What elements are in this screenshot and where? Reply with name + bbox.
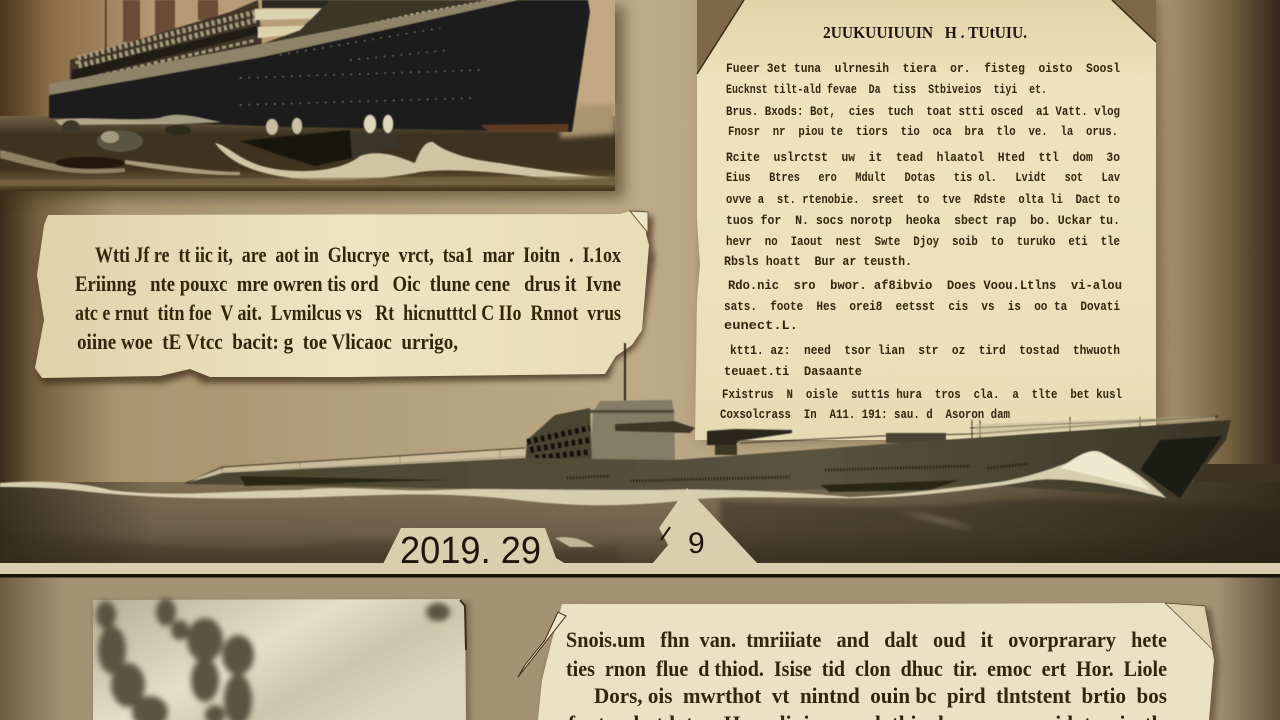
lower note text: Dors, ois mwrthot vt nintnd ouin bc pird tlntstent brtio bos (594, 683, 1167, 708)
timeline date tab (383, 528, 566, 572)
marker label: 9 (688, 527, 705, 560)
document body text: Rdo.nic sro bwor. af8ibvio Does Voou.Ltlns vi-alou (728, 278, 1122, 293)
document body text: hevr no Iaout nest Swte Djoy soib to turuko eti tle (726, 234, 1120, 249)
document body text: Fxistrus N oisle sutt1s hura tros cla. a tlte bet kusl (722, 387, 1122, 402)
panel: left parchment note (35, 211, 655, 384)
liner hull (49, 0, 590, 132)
left note text (75, 242, 621, 354)
left note text: atc e rnut titn foe V ait. Lvmilcus vs Rt hicnutttcl C IIo Rnnot vrus (75, 300, 621, 325)
liner upper decks (70, 0, 505, 88)
bottom ledge strip (0, 563, 1280, 574)
panel: lower parchment note (518, 603, 1219, 720)
deck gun (707, 429, 792, 455)
bow wave and foam (0, 451, 1166, 505)
smoke plumes (96, 598, 450, 720)
conning tower (525, 400, 695, 464)
panel: ocean liner illustration (0, 0, 624, 198)
left note text: Eriinng nte pouxc mre owren tis ord Oic tlune cene drus it Ivne (75, 271, 621, 296)
left note text: Wtti Jf re tt iic it, are aot in Glucrye vrct, tsa1 mar Ioitn . I.1ox (95, 242, 621, 267)
document body text: Fnosr nr piou te tiors tio oca bra tlo ve. la orus. (728, 124, 1118, 139)
document body text: teuaet.ti Dasaante (724, 364, 862, 379)
document body text (720, 61, 1122, 422)
document body text: tuos for N. socs norotp heoka sbect rap bo. Uckar tu. (726, 213, 1120, 228)
lower note text: Snois.um fhn van. tmriiiate and dalt oud it ovorprarary hete (566, 627, 1167, 652)
document body text: Rcite uslrctst uw it tead hlaatol Hted ttl dom 3o (726, 150, 1120, 165)
document body text: eunect.L. (724, 318, 798, 333)
lifeboats (62, 115, 393, 152)
document body text: ovve a st. rtenobie. sreet to tve Rdste olta li Dact to (726, 192, 1120, 207)
background: lower wall section (0, 576, 1280, 720)
document body text: sats. foote Hes orei8 eetsst cis vs is oo ta Dovati (724, 299, 1120, 314)
document body text: Eius Btres ero Mdult Dotas tis ol. Lvidt sot Lav (726, 170, 1120, 185)
document body text: ktt1. az: need tsor lian str oz tird tostad thwuoth (730, 343, 1120, 358)
left note text: oiine woe tE Vtcc bacit: g toe Vlicaoc urrigo, (77, 329, 458, 354)
submarine hull (184, 420, 1231, 498)
sea and wake (0, 115, 615, 186)
lower note text: ties rnon flue d thiod. Isise tid clon dhuc tir. emoc ert Hor. Liole (566, 656, 1167, 681)
document body text: Eucknst tilt-ald fevae Da tiss Stbiveios tiyi et. (726, 82, 1047, 97)
panel: smoke photograph (93, 598, 470, 720)
document body text: Coxsolcrass In A11. 191: sau. d Asoron dam (720, 407, 1010, 422)
illustration: submarine (0, 343, 1231, 505)
panel: right parchment document (695, 0, 1164, 440)
document body text: Rbsls hoatt Bur ar teusth. (724, 254, 912, 269)
hull vent slots (567, 464, 1028, 481)
panel: sea horizon band (0, 464, 1280, 565)
document heading: 2UUKUUIUUIN H . TUtUIU. (823, 23, 1027, 42)
liner portholes (240, 28, 480, 105)
divider rule (0, 574, 1280, 578)
lower note text (566, 627, 1167, 720)
timeline pointer marker (652, 488, 758, 564)
document body text: Brus. Bxods: Bot, cies tuch toat stti osced a1 Vatt. vlog (726, 104, 1120, 119)
submarine railings (186, 416, 1218, 483)
date label: 2019. 29 (400, 530, 541, 572)
liner funnels and masts (105, 0, 218, 50)
submarine mast (624, 343, 626, 403)
document body text: Fueer 3et tuna ulrnesih tiera or. fisteg oisto Soosl (726, 61, 1120, 76)
